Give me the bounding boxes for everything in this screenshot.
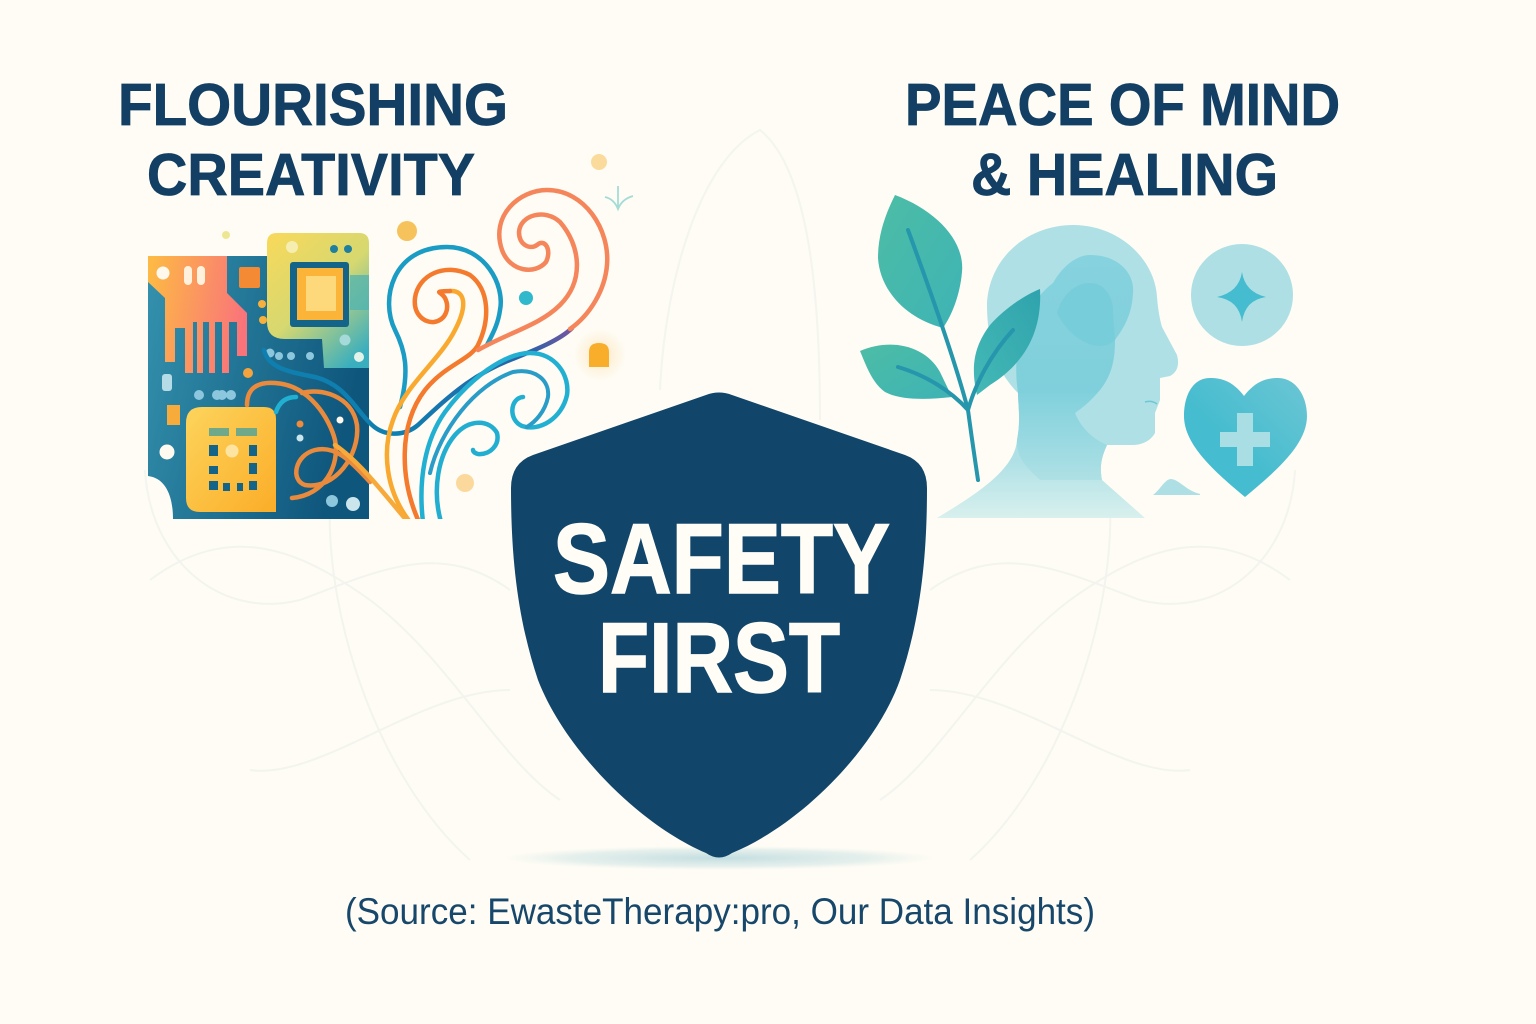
illustration: circuit board turning into swirls	[148, 154, 633, 522]
source note: (Source: EwasteTherapy:pro, Our Data Insights)	[345, 891, 1095, 932]
shield shadow	[504, 846, 934, 870]
shield: safety first: SAFETY	[553, 503, 890, 614]
illustration: head with leaves and healing icons	[860, 195, 1307, 518]
heading: flourishing creativity	[118, 72, 508, 208]
heading: peace of mind and healing: & HEALING	[971, 142, 1278, 208]
icon: sparkle in circle	[1191, 244, 1293, 346]
decorative dots and sparkles	[222, 154, 633, 492]
top processor chip	[267, 233, 369, 368]
heading: flourishing creativity: FLOURISHING	[118, 72, 508, 138]
leafy branch	[860, 195, 1040, 480]
circuit board	[148, 233, 369, 519]
head silhouette	[937, 225, 1178, 518]
flowing swirls	[247, 190, 607, 522]
lower processor chip	[186, 407, 276, 512]
heading: peace of mind and healing	[905, 72, 1340, 208]
small mound	[1153, 479, 1200, 495]
heading: flourishing creativity: CREATIVITY	[147, 142, 475, 208]
icon: heart with cross	[1184, 378, 1307, 497]
shield: safety first: FIRST	[598, 602, 840, 713]
shield: safety first	[511, 392, 927, 858]
infographic canvas	[121, 83, 1338, 932]
heading: peace of mind and healing: PEACE OF MIND	[905, 72, 1340, 138]
